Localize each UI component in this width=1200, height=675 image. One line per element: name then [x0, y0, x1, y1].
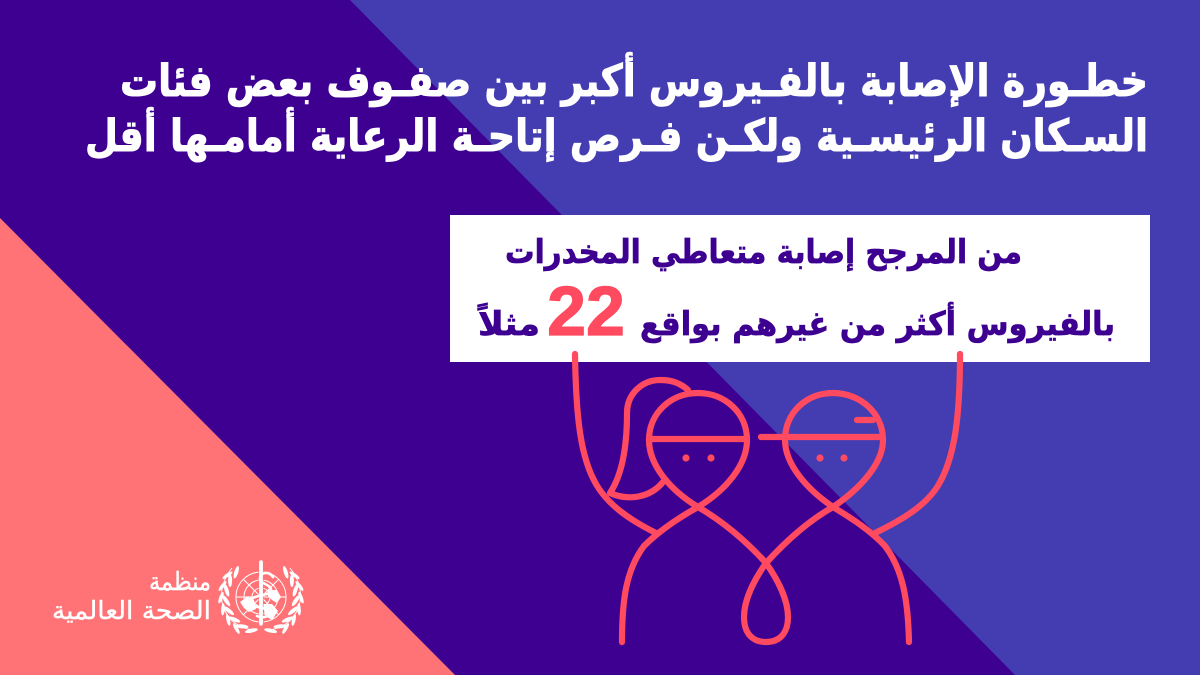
illustration: two people holding sign	[575, 354, 960, 642]
statistic: 22: 22	[547, 272, 625, 350]
laurel wreath right	[264, 565, 305, 635]
cap detail	[857, 417, 873, 423]
right arm	[875, 354, 960, 533]
globe	[236, 572, 286, 622]
left head and right shoulder	[622, 393, 766, 642]
organization name line 2: الصحة العالمية	[52, 596, 211, 625]
serpent	[250, 573, 273, 617]
callout line 2 end: مثلاً	[477, 302, 540, 343]
callout line 1: من المرجح إصابة متعاطي المخدرات	[505, 232, 1022, 272]
organization name	[52, 567, 211, 625]
cap brim	[761, 434, 879, 440]
WHO emblem	[217, 560, 305, 635]
callout box	[450, 215, 1150, 362]
organization name line 1: منظمة	[149, 567, 211, 596]
title	[85, 52, 1148, 162]
eyes	[816, 454, 848, 462]
right person	[744, 354, 960, 642]
background: coral diagonal panel	[0, 218, 455, 675]
callout line 2: بالفيروس أكثر من غيرهم بواقع	[640, 302, 1115, 344]
background: blue-violet diagonal panel	[350, 0, 1200, 675]
ponytail	[610, 380, 688, 497]
left arm	[575, 354, 656, 533]
left person	[575, 354, 766, 642]
continents	[240, 590, 281, 620]
staff	[259, 560, 263, 626]
callout background	[450, 215, 1150, 362]
laurel wreath left	[217, 565, 258, 635]
eyes	[682, 454, 715, 462]
headband	[652, 436, 745, 442]
right head and body with loop	[744, 393, 909, 642]
